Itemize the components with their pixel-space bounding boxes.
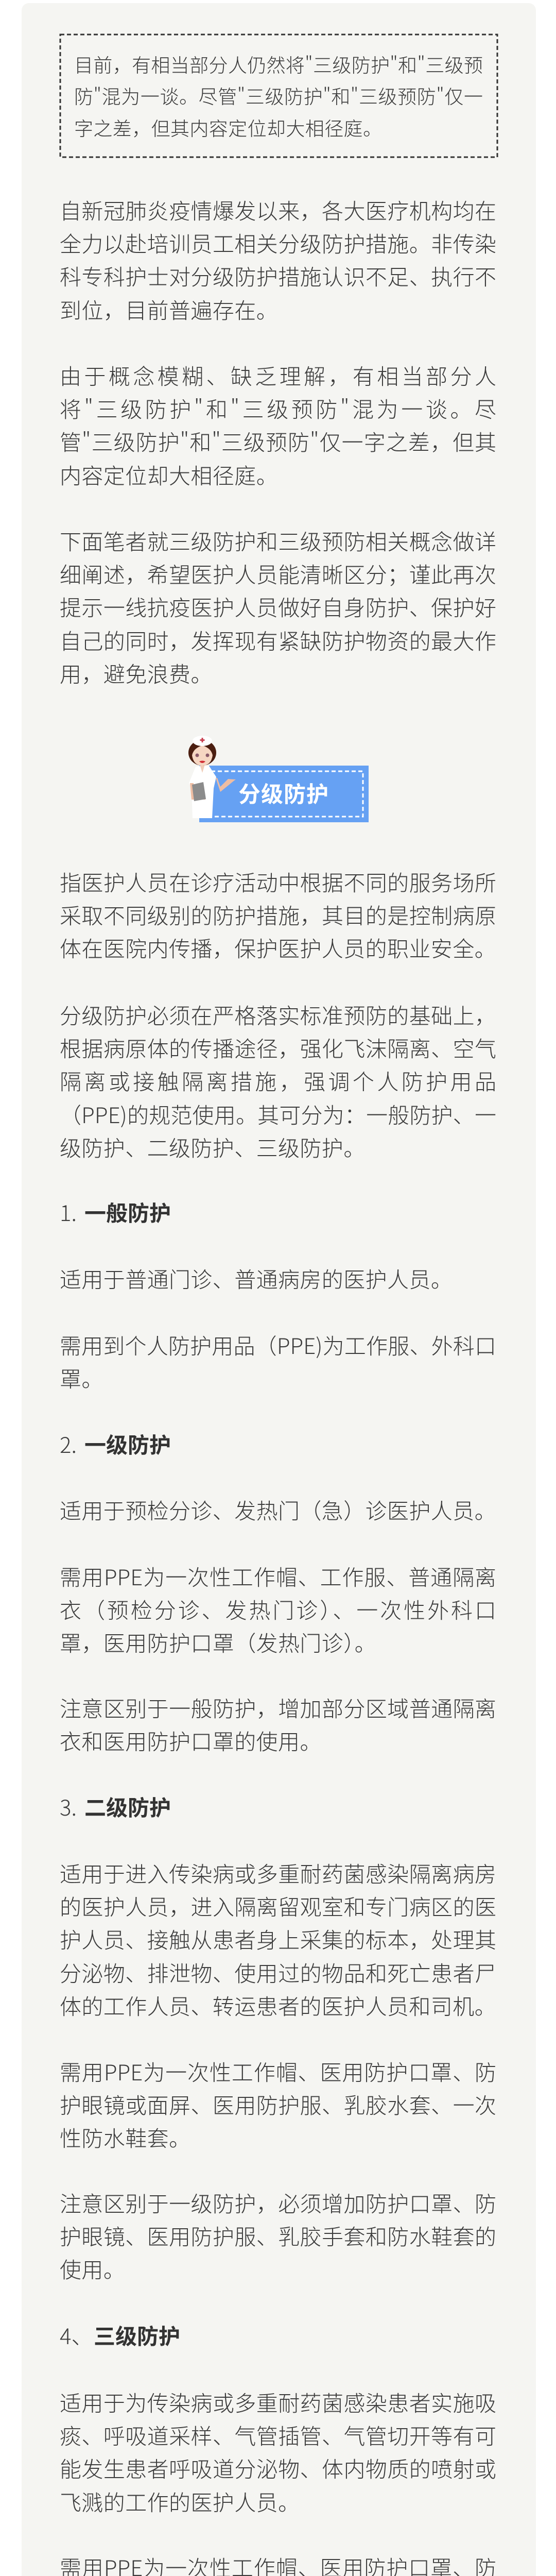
text block: classification [60, 999, 496, 1163]
text block: concept confusion: 管"三级防护"和"三级预防"仅一字之差，但其 [60, 426, 496, 457]
text block: definition: 采取不同级别的防护措施，其目的是控制病原 [60, 899, 496, 930]
text block: article purpose: 提示一线抗疫医护人员做好自身防护、保护好 [60, 591, 496, 622]
text block: concept confusion: 内容定位却大相径庭。 [60, 459, 278, 490]
text block: level one note: 注意区别于一般防护，增加部分区域普通隔离 [60, 1692, 496, 1723]
banner background and nurse illustration [188, 736, 369, 822]
text block: general PPE [60, 1329, 496, 1394]
text block: level three scope: 痰、呼吸道采样、气管插管、气管切开等有可 [60, 2419, 496, 2451]
text block: level one PPE [60, 1561, 496, 1658]
text block: introduction: 到位，目前普遍存在。 [60, 294, 278, 325]
heading: general protection: 1. [60, 1196, 77, 1228]
text block: level two note [60, 2187, 496, 2284]
text block: level two PPE: 需用PPE为一次性工作帽、医用防护口罩、防 [60, 2056, 496, 2087]
text block: level one PPE: 需用PPE为一次性工作帽、工作服、普通隔离 [60, 1561, 496, 1592]
text block: level three scope: 飞溅的工作的医护人员。 [60, 2486, 300, 2517]
text block: level two scope [60, 1857, 496, 2021]
text block: level two note: 注意区别于一级防护，必须增加防护口罩、防 [60, 2187, 496, 2218]
text block: level two scope: 分泌物、排泄物、使用过的物品和死亡患者尸 [60, 1957, 496, 1988]
callout: summary text: 目前，有相当部分人仍然将"三级防护"和"三级预 [74, 50, 483, 78]
text block: level one PPE: 衣（预检分诊、发热门诊）、一次性外科口 [60, 1594, 496, 1625]
text block: level two note: 护眼镜、医用防护服、乳胶手套和防水鞋套的 [60, 2220, 496, 2251]
callout: summary text: 防"混为一谈。尽管"三级防护"和"三级预防"仅一 [74, 81, 483, 109]
text block: level one scope: 适用于预检分诊、发热门（急）诊医护人员。 [60, 1494, 496, 1526]
heading: level two protection: 3. [60, 1791, 77, 1822]
text block: concept confusion [60, 360, 496, 490]
text block: definition: 体在医院内传播，保护医护人员的职业安全。 [60, 932, 496, 963]
text block: concept confusion: 将"三级防护"和"三级预防"混为一谈。尽 [60, 393, 496, 424]
text block: article purpose: 下面笔者就三级防护和三级预防相关概念做详 [60, 525, 496, 556]
text block: level two PPE [60, 2056, 496, 2153]
heading: level three protection: 4、 [60, 2319, 93, 2351]
text block: introduction: 全力以赴培训员工相关分级防护措施。非传染 [60, 227, 496, 259]
callout: summary text: 字之差，但其内容定位却大相径庭。 [74, 113, 382, 141]
heading: level one protection: 一级防护 [84, 1428, 171, 1460]
text block: introduction: 自新冠肺炎疫情爆发以来，各大医疗机构均在 [60, 194, 496, 226]
text block: general PPE: 需用到个人防护用品（PPE)为工作服、外科口 [60, 1329, 496, 1361]
heading: level two protection: 二级防护 [84, 1791, 171, 1822]
callout: dashed summary box border [60, 34, 498, 158]
text block: definition: 指医护人员在诊疗活动中根据不同的服务场所 [60, 866, 496, 897]
text block: classification: （PPE)的规范使用。其可分为：一般防护、一 [60, 1098, 496, 1130]
text block: general scope: 适用于普通门诊、普通病房的医护人员。 [60, 1263, 453, 1294]
text block: level two scope: 的医护人员，进入隔离留观室和专门病区的医 [60, 1890, 496, 1922]
text block: level one note [60, 1692, 496, 1756]
text block: classification: 级防护、二级防护、三级防护。 [60, 1131, 366, 1163]
text block: classification: 隔离或接触隔离措施，强调个人防护用品 [60, 1065, 496, 1096]
text block: level three scope: 能发生患者呼吸道分泌物、体内物质的喷射或 [60, 2452, 496, 2484]
text block: level three scope [60, 2386, 496, 2517]
text block: classification: 根据病原体的传播途径，强化飞沫隔离、空气 [60, 1032, 496, 1063]
text block: level two scope: 护人员、接触从患者身上采集的标本，处理其 [60, 1923, 496, 1955]
text block: concept confusion: 由于概念模糊、缺乏理解，有相当部分人 [60, 360, 496, 391]
text block: introduction: 科专科护士对分级防护措施认识不足、执行不 [60, 260, 496, 292]
text block: level two PPE: 护眼镜或面屏、医用防护服、乳胶水套、一次 [60, 2089, 496, 2120]
text block: article purpose: 用，避免浪费。 [60, 657, 213, 689]
text block: level two note: 使用。 [60, 2253, 125, 2284]
text block: level two scope: 体的工作人员、转运患者的医护人员和司机。 [60, 1990, 496, 2021]
text block: article purpose: 自己的同时，发挥现有紧缺防护物资的最大作 [60, 624, 496, 656]
heading: level three protection: 三级防护 [94, 2319, 180, 2351]
text block: level one PPE: 罩，医用防护口罩（发热门诊）。 [60, 1626, 376, 1658]
text block: definition [60, 866, 496, 963]
text block: level two PPE: 性防水鞋套。 [60, 2122, 190, 2153]
text block: introduction [60, 194, 496, 325]
text block: general PPE: 罩。 [60, 1362, 103, 1394]
heading: level one protection: 2. [60, 1428, 77, 1460]
heading: general protection: 一般防护 [84, 1196, 171, 1228]
text block: level two scope: 适用于进入传染病或多重耐药菌感染隔离病房 [60, 1857, 496, 1889]
text block: article purpose: 细阐述，希望医护人员能清晰区分；谨此再次 [60, 558, 496, 589]
text block: level three scope: 适用于为传染病或多重耐药菌感染患者实施吸 [60, 2386, 496, 2418]
heading banner: 分级防护 with nurse [188, 736, 369, 822]
text block: article purpose [60, 525, 496, 689]
text block: level one note: 衣和医用防护口罩的使用。 [60, 1725, 322, 1756]
callout: summary text [74, 50, 483, 141]
banner title text: 分级防护 [238, 777, 329, 809]
text block: classification: 分级防护必须在严格落实标准预防的基础上， [60, 999, 496, 1030]
